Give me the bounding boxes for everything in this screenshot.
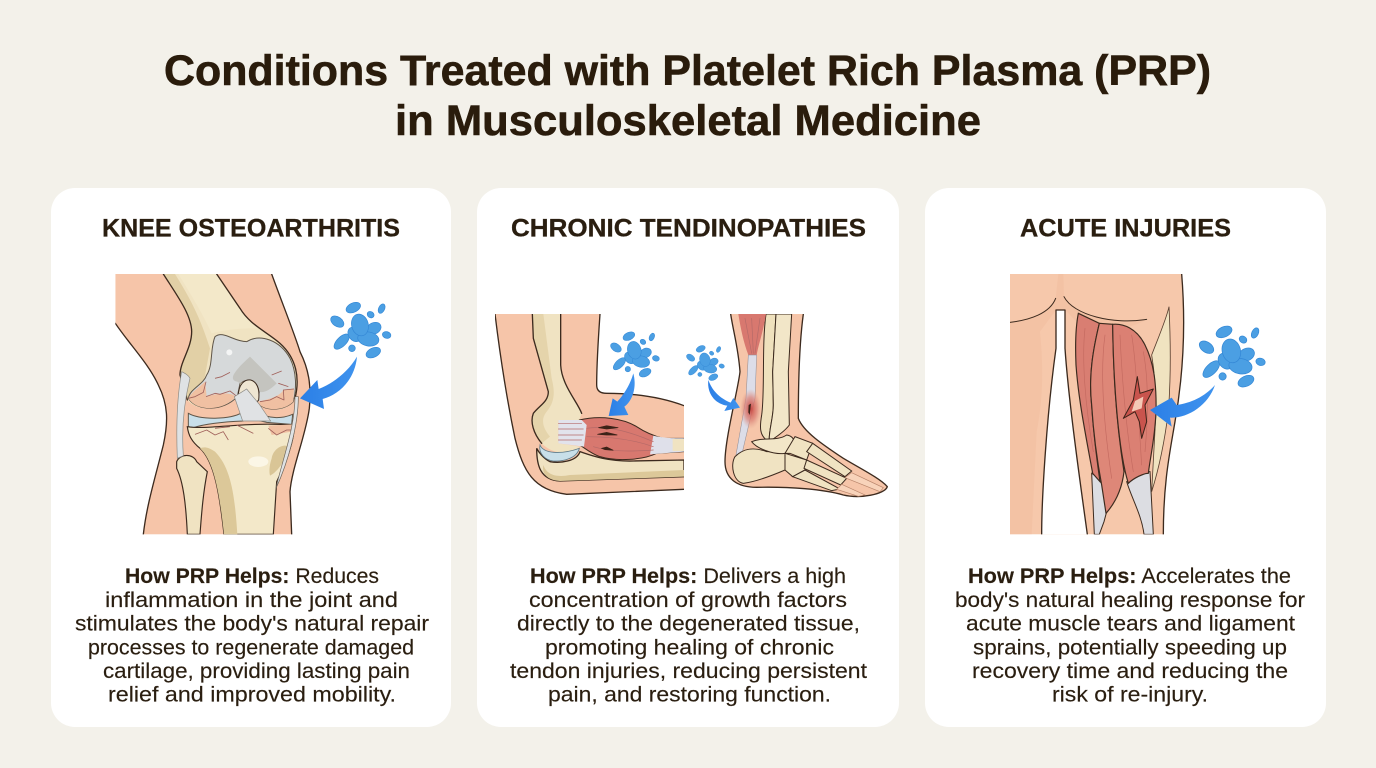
icon: platelets elbow [609,330,660,379]
muscle bellies [1076,313,1100,482]
illustration: elbow and ankle [495,314,887,496]
elbow arrow [609,373,635,416]
tendon [558,420,587,447]
text block: cartilage, providing lasting pain [103,660,410,683]
text block: relief and improved mobility. [108,684,396,706]
panel: chronic tendinopathies [477,188,899,727]
text block: recovery time and reducing the [972,660,1288,683]
text block: processes to regenerate damaged [88,636,414,659]
panel: acute injuries [925,188,1326,727]
text block [955,565,1305,706]
tibia and fibula [760,314,776,442]
icon: platelets [1197,324,1266,389]
text block: inflammation in the joint and [105,589,398,612]
inflamed area [741,390,760,427]
text block [75,565,429,706]
beige bone strip [1152,307,1170,492]
heading: acute injuries: ACUTE INJURIES [1020,214,1231,242]
ankle arrow [708,380,740,411]
elbow [495,314,684,494]
text block: pain, and restoring function. [548,684,831,706]
text block [510,565,867,706]
title [164,47,1211,145]
text block: How PRP Helps: Reduces [125,565,379,588]
text block: sprains, potentially speeding up [973,636,1287,659]
text block: How PRP Helps: Accelerates the [968,565,1291,588]
text block: body's natural healing response for [955,589,1305,612]
muscle tear [1123,377,1153,438]
panel background [925,188,1326,727]
femoral notch [238,380,259,402]
forearm muscle [579,418,684,460]
text block: tendon injuries, reducing persistent [510,660,867,683]
text block: risk of re-injury. [1052,684,1208,706]
cartilage [188,335,296,409]
panel background [477,188,899,727]
worn cartilage patches [188,382,236,408]
heading: knee osteoarthritis: KNEE OSTEOARTHRITIS [102,214,400,242]
leg gap [1042,310,1087,534]
text block: stimulates the body's natural repair [75,612,429,636]
title: in Musculoskeletal Medicine [395,97,981,145]
tendon tears [597,426,618,450]
ulna [537,448,684,481]
text block: promoting healing of chronic [545,636,834,659]
arrow [1150,385,1215,427]
illustration: thigh muscle tear [1010,274,1215,534]
ligaments [234,389,271,421]
title: Conditions Treated with Platelet Rich Plasma (PRP) [164,47,1211,95]
foot bones [733,449,785,483]
fibula [177,455,207,534]
illustration: knee joint [115,274,357,534]
panel background [51,188,451,727]
heading: chronic tendinopathies: CHRONIC TENDINOPATHIES [511,214,866,242]
text block: acute muscle tears and ligament [966,612,1295,636]
text block: How PRP Helps: Delivers a high [530,565,846,588]
arrow [300,357,357,409]
calf muscle and tendon [738,314,766,355]
icon: platelets ankle [685,344,725,382]
tibia [187,424,294,534]
text block: concentration of growth factors [529,589,847,612]
meniscus [188,412,243,428]
tendons [1091,472,1107,534]
text block: directly to the degenerated tissue, [517,612,860,636]
humerus [532,314,582,453]
icon: platelets [329,300,392,360]
ankle and foot [725,314,887,496]
panel: knee osteoarthritis [51,188,451,727]
femur [163,274,297,409]
